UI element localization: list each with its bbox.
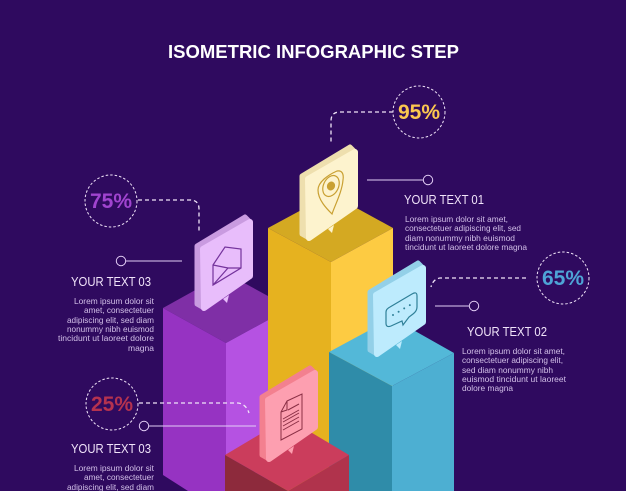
text block: your text 03 top: YOUR TEXT 03 [71, 274, 151, 289]
text block: your text 02: Lorem ipsum dolor sit amet, [462, 346, 565, 356]
text block: your text 02: euismod tincidunt ut laoreet [462, 374, 567, 384]
text block: your text 03 top: magna [128, 343, 154, 353]
icon card: document [262, 368, 315, 459]
text block: your text 02: sed diam nonummy nibh [462, 365, 553, 375]
text block: your text 01: tincidunt ut laoreet dolore magna [405, 242, 527, 252]
callout: 25%: 25% [91, 393, 133, 416]
callout: 95% [331, 86, 445, 144]
callout: 75%: 75% [90, 190, 132, 213]
text block: your text 02: YOUR TEXT 02 [467, 324, 547, 339]
text block: your text 03 top: adipiscing elit, sed diam [67, 315, 154, 325]
red column [225, 418, 349, 491]
purple column [163, 273, 290, 491]
teal column [329, 318, 454, 491]
text block: your text 01: consectetuer adipiscing elit, sed [405, 223, 521, 233]
text block: your text 03 top: nonummy nibh euismod [67, 324, 154, 334]
title: ISOMETRIC INFOGRAPHIC STEP [168, 41, 459, 62]
connector 01 [367, 175, 433, 185]
callout: 25% [86, 378, 249, 430]
text block: your text 03 bottom: amet, consectetuer [84, 472, 154, 482]
icon card: location pin [302, 147, 355, 238]
text block: your text 01: YOUR TEXT 01 [404, 192, 484, 207]
text block: your text 03 top: amet, consectetuer [84, 305, 154, 315]
text block: your text 02 [462, 324, 567, 393]
text block: your text 03 bottom: YOUR TEXT 03 [71, 441, 151, 456]
text block: your text 01: diam nonummy nibh euismod [405, 233, 515, 243]
text block: your text 03 top: tincidunt ut laoreet dolore [58, 333, 154, 343]
text block: your text 03 top [58, 274, 155, 353]
connector 03 bottom [139, 421, 256, 431]
text block: your text 01 [404, 192, 527, 252]
text block: your text 03 bottom [67, 441, 155, 491]
icon card: envelope [197, 217, 250, 308]
callout: 65% [431, 252, 589, 304]
text block: your text 01: Lorem ipsum dolor sit amet, [405, 214, 508, 224]
text block: your text 03 top: Lorem ipsum dolor sit [74, 296, 155, 306]
callout: 75% [85, 175, 199, 232]
connector 02 [435, 301, 479, 311]
yellow column [268, 194, 393, 491]
callout: 65%: 65% [542, 267, 584, 290]
text block: your text 03 bottom: Lorem ipsum dolor sit [74, 463, 155, 473]
text block: your text 02: consectetuer adipiscing elit, [462, 355, 563, 365]
icon card: chat bubble [370, 263, 423, 354]
connector 03 top [116, 256, 182, 266]
text block: your text 02: dolore magna [462, 383, 513, 393]
callout: 95%: 95% [398, 101, 440, 124]
